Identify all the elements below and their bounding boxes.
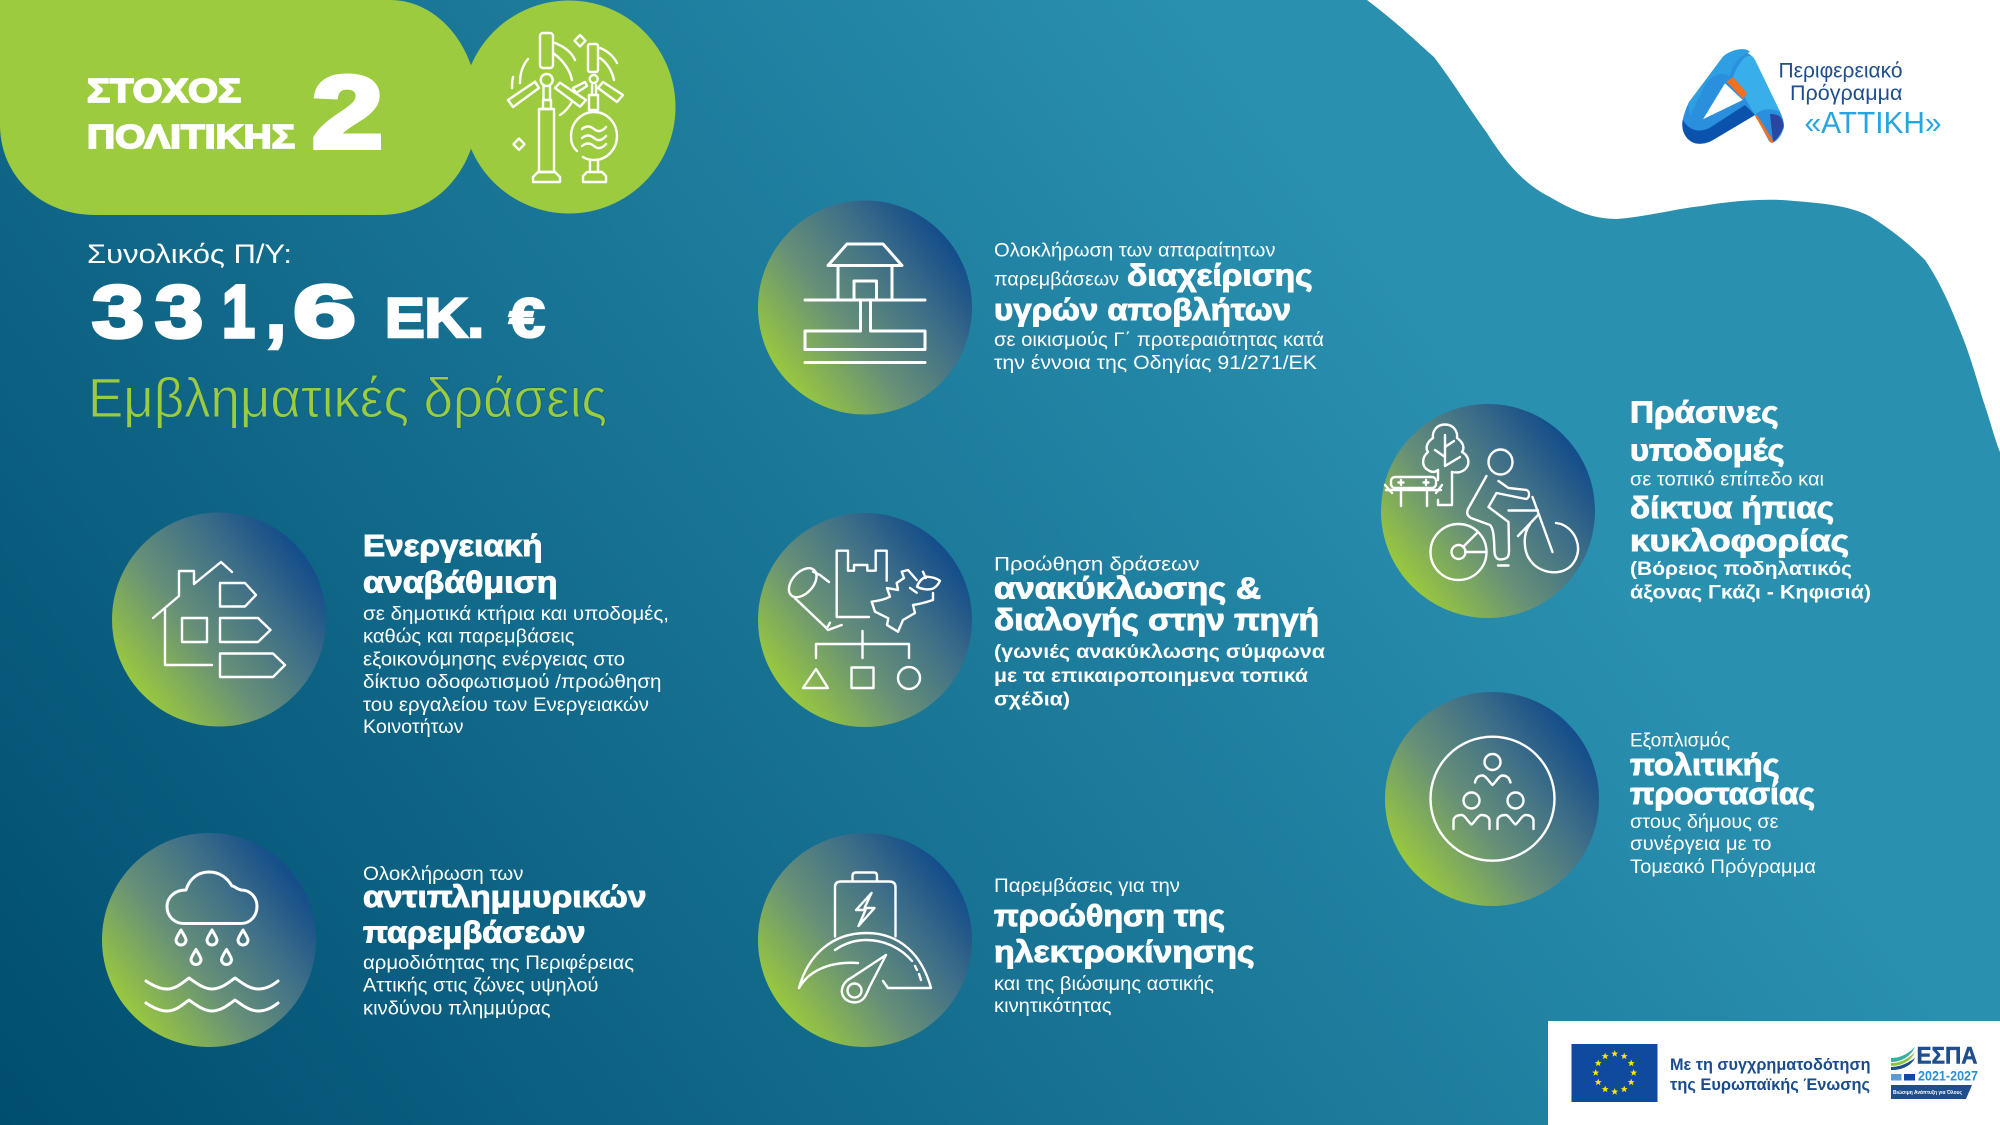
text: co-funding: της Ευρωπαϊκής Ένωσης <box>1670 1075 1870 1094</box>
logo: Attica regional programme <box>1682 49 1942 144</box>
icon: wind turbines <box>508 33 623 182</box>
header: policy goal badge <box>0 0 676 215</box>
text: wastewater management: υγρών αποβλήτων <box>994 292 1291 327</box>
logo: ESPA 2021-2027: 2021-2027 <box>1918 1068 1978 1084</box>
text: electromobility: κινητικότητας <box>994 996 1112 1017</box>
panel: flood protection <box>102 833 646 1047</box>
budget value: 1 <box>222 270 255 353</box>
text: flood protection: παρεμβάσεων <box>363 914 586 950</box>
text: green infrastructure: άξονας Γκάζι - Κηφισιά) <box>1630 582 1871 604</box>
panel: electromobility <box>758 833 1254 1047</box>
logo text: Πρόγραμμα <box>1790 82 1902 105</box>
text: green infrastructure: σε τοπικό επίπεδο και <box>1630 470 1824 490</box>
text: recycling: σχέδια) <box>994 690 1070 710</box>
title: policy goal: ΠΟΛΙΤΙΚΗΣ <box>87 118 295 155</box>
text: civil protection: συνέργεια με το <box>1630 834 1772 855</box>
text: green infrastructure: δίκτυα ήπιας <box>1630 490 1834 525</box>
panel: energy upgrade <box>112 512 669 738</box>
budget value: 3 <box>155 270 203 353</box>
budget value: 6 <box>293 270 356 353</box>
text: civil protection: Εξοπλισμός <box>1630 730 1730 752</box>
text: civil protection: στους δήμους σε <box>1630 812 1779 833</box>
text: green infrastructure: υποδομές <box>1630 432 1784 468</box>
text: recycling: διαλογής στην πηγή <box>994 602 1319 637</box>
panel: green infrastructure <box>1381 394 1871 618</box>
logo text: «ΑΤΤΙΚΗ» <box>1804 105 1942 140</box>
text: recycling <box>994 554 1325 710</box>
text: civil protection: προστασίας <box>1630 776 1815 811</box>
text: green infrastructure: Πράσινες <box>1630 394 1778 430</box>
text: flood protection: κινδύνου πλημμύρας <box>363 998 550 1020</box>
text: green infrastructure <box>1630 394 1871 604</box>
text: wastewater management: Ολοκλήρωση των απαραίτητων <box>994 240 1276 262</box>
text: energy upgrade: του εργαλείου των Ενεργειακών <box>363 695 649 716</box>
text: energy upgrade <box>363 528 669 738</box>
text: energy upgrade: σε δημοτικά κτήρια και υποδομές, <box>363 604 669 625</box>
budget label: Συνολικός Π/Υ: <box>87 239 292 269</box>
icon: people in circle <box>1385 692 1599 906</box>
icon: rain cloud and waves <box>102 833 316 1047</box>
text: co-funding: Με τη συγχρηματοδότηση <box>1670 1055 1870 1074</box>
budget: total <box>87 239 545 353</box>
text: energy upgrade: εξοικονόμησης ενέργειας στο <box>363 650 625 670</box>
text: recycling: με τα επικαιροποιημενα τοπικά <box>994 666 1308 687</box>
panel: civil protection <box>1385 692 1816 906</box>
text: civil protection <box>1630 730 1816 878</box>
text: wastewater management: την έννοια της Οδηγίας 91/271/ΕΚ <box>994 353 1317 374</box>
text: civil protection: Τομεακό Πρόγραμμα <box>1630 857 1816 878</box>
icon: house energy <box>112 512 326 726</box>
text: electromobility: ηλεκτροκίνησης <box>994 934 1254 969</box>
text: energy upgrade: δίκτυο οδοφωτισμού /προώθηση <box>363 672 662 693</box>
icon: EU flag <box>1572 1044 1658 1102</box>
text: energy upgrade: Ενεργειακή <box>363 528 542 563</box>
text: flood protection: αρμοδιότητας της Περιφέρειας <box>363 953 634 974</box>
text: civil protection: πολιτικής <box>1630 747 1780 782</box>
footer: funding logos <box>1548 1021 2000 1125</box>
title: policy goal: ΣΤΟΧΟΣ <box>87 72 241 109</box>
text: recycling: (γωνιές ανακύκλωσης σύμφωνα <box>994 642 1325 663</box>
icon: battery and gauge <box>758 833 972 1047</box>
text: recycling: ανακύκλωσης & <box>994 570 1261 606</box>
text: energy upgrade: Κοινοτήτων <box>363 717 464 738</box>
text: energy upgrade: αναβάθμιση <box>363 564 558 600</box>
logo text <box>1778 60 1942 140</box>
text: flood protection: Αττικής στις ζώνες υψηλού <box>363 976 598 996</box>
logo: ESPA 2021-2027: Βιώσιμη Ανάπτυξη για Όλους <box>1893 1090 1962 1096</box>
text: flood protection: αντιπλημμυρικών <box>363 879 646 914</box>
budget value <box>92 270 545 353</box>
text: recycling: Προώθηση δράσεων <box>994 554 1200 576</box>
budget value: ΕΚ. <box>385 286 484 349</box>
text: co-funding <box>1670 1055 1870 1094</box>
budget value: € <box>509 286 545 349</box>
budget value: , <box>266 270 286 353</box>
text: wastewater management: σε οικισμούς Γ΄ προτεραιότητας κατά <box>994 330 1324 351</box>
icon: house and sewage tank <box>758 200 972 414</box>
icon: tree bench cyclist <box>1381 404 1595 618</box>
text: electromobility: Παρεμβάσεις για την <box>994 876 1180 897</box>
logo: ESPA 2021-2027 <box>1891 1042 1978 1099</box>
text: green infrastructure: (Βόρειος ποδηλατικός <box>1630 559 1852 580</box>
text: electromobility <box>994 876 1254 1017</box>
text: flood protection <box>363 864 646 1020</box>
icon: recycling sorting <box>758 513 972 727</box>
text: green infrastructure: κυκλοφορίας <box>1630 523 1849 558</box>
budget value: 3 <box>92 270 144 353</box>
text: wastewater management <box>994 240 1324 374</box>
panel: recycling <box>758 513 1325 727</box>
text: electromobility: προώθηση της <box>994 898 1225 933</box>
logo: ESPA 2021-2027: ΕΣΠΑ <box>1916 1042 1978 1070</box>
text: energy upgrade: καθώς και παρεμβάσεις <box>363 626 574 648</box>
panel: wastewater management <box>758 200 1324 414</box>
text: wastewater management: παρεμβάσεων <box>994 270 1119 290</box>
text: flood protection: Ολοκλήρωση των <box>363 864 524 885</box>
heading: flagship actions: Εμβληματικές δράσεις <box>88 366 607 429</box>
logo mark <box>1682 49 1784 144</box>
text: wastewater management: διαχείρισης <box>1127 258 1312 292</box>
logo text: Περιφερειακό <box>1778 60 1902 82</box>
text: electromobility: και της βιώσιμης αστικής <box>994 974 1214 995</box>
number 2: 2 <box>312 56 383 170</box>
title: policy goal <box>87 72 295 155</box>
